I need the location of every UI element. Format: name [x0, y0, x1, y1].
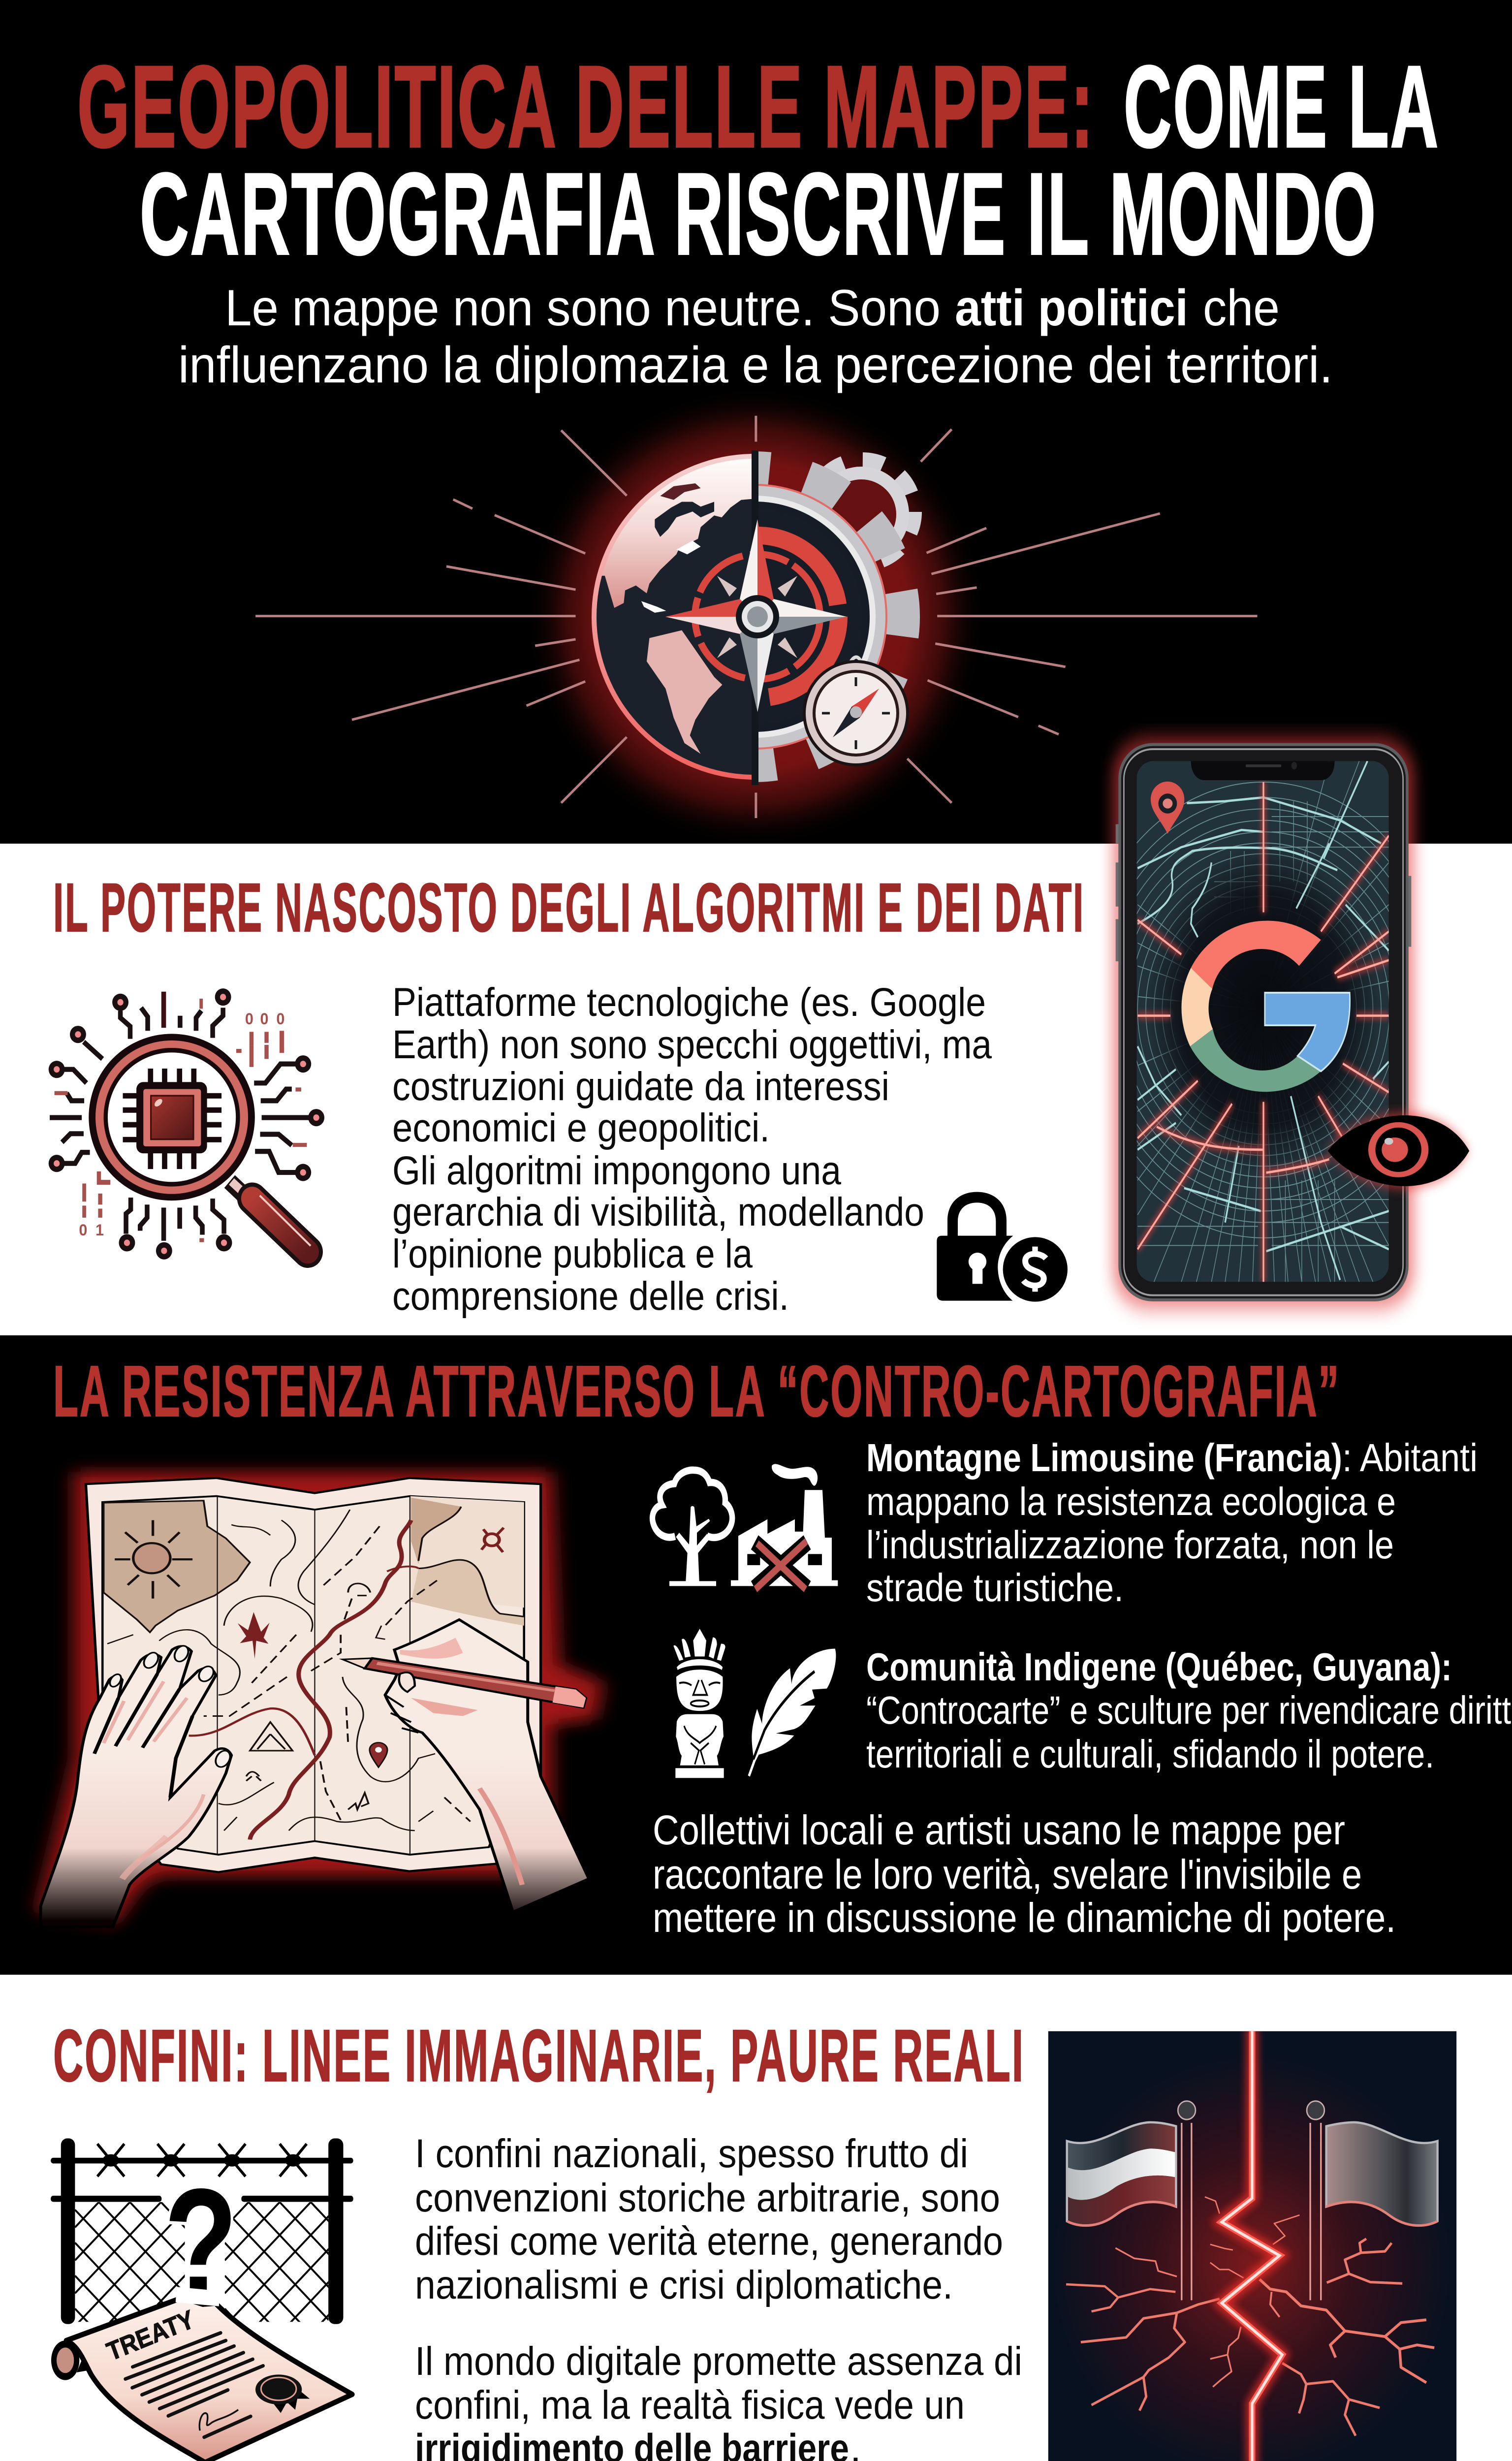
magnifier handle [230, 1181, 311, 1252]
text block: nazionalismi e crisi diplomatiche. [415, 2263, 953, 2307]
small compass [803, 657, 909, 766]
text block: Gli algoritmi impongono una [392, 1148, 841, 1193]
panel: hidden power of algorithms [0, 844, 1512, 1335]
magnifier lens [89, 1034, 255, 1200]
icon: globe, compass and gear with rays [255, 385, 1258, 848]
icon: eye [1328, 1112, 1469, 1189]
text: collectives paragraph: mettere in discussione le dinamiche di potere. [653, 1894, 1396, 1941]
text: collectives paragraph [653, 1807, 1396, 1941]
text: Montagne Limousine: l’industrializzazione forzata, non le [866, 1523, 1394, 1567]
binary digits [55, 999, 307, 1242]
globe [592, 454, 752, 780]
left hand [41, 1644, 233, 1927]
text block: comprensione delle crisi. [392, 1274, 789, 1319]
icon: barbed wire fence and treaty [51, 2138, 355, 2461]
text block: costruzioni guidate da interessi [392, 1064, 889, 1109]
fence [51, 2096, 353, 2440]
text: Montagne Limousine: mappano la resistenza ecologica e [866, 1480, 1396, 1523]
map glow [37, 1472, 604, 1924]
red cross [755, 1541, 807, 1589]
icon: padlock and dollar coin [937, 1192, 1068, 1302]
text: Montagne Limousine: : Abitanti [1342, 1436, 1478, 1480]
text block: difesi come verità eterne, generando [415, 2219, 1003, 2264]
panel: borders [0, 1975, 1512, 2461]
text block [392, 980, 992, 1319]
text block: Earth) non sono specchi oggettivi, ma [392, 1022, 992, 1067]
binary digits: 0 [260, 1010, 269, 1028]
text block: convenzioni storiche arbitrarie, sono [415, 2176, 1000, 2220]
folded paper [86, 1478, 541, 1872]
text: collectives paragraph: raccontare le loro verità, svelare l'invisibile e [653, 1851, 1362, 1897]
panel: header [77, 42, 1440, 833]
text block: confini, ma la realtà fisica vede un [415, 2383, 965, 2428]
subtitle: atti politici [955, 280, 1188, 337]
text block: I confini nazionali, spesso frutto di [415, 2131, 968, 2176]
red routes [189, 1520, 418, 1839]
tree [653, 1470, 732, 1586]
treaty document [51, 2287, 352, 2461]
text: collectives paragraph: Collettivi locali e artisti usano le mappe per [653, 1807, 1345, 1853]
binary digits: 0 [79, 1221, 87, 1239]
seal [255, 2374, 310, 2413]
illustration: smartphone map with Google G [1102, 724, 1473, 1322]
subtitle: influenzano la diplomazia e la percezione dei territori. [178, 337, 1333, 394]
chip [123, 1069, 221, 1169]
factory [731, 1464, 838, 1586]
statue [673, 1629, 725, 1778]
treaty label: TREATY [103, 2304, 198, 2366]
title [77, 42, 1440, 279]
circuit nodes [49, 988, 324, 1260]
text block [415, 2131, 1022, 2461]
phone screen map [1077, 761, 1449, 1282]
map symbols [115, 1520, 504, 1809]
small gear [812, 461, 913, 563]
icon: statue and feather [673, 1629, 836, 1778]
text: Comunità Indigene [866, 1645, 1512, 1776]
large gear [758, 451, 920, 782]
icon: magnifier over chip [49, 988, 324, 1260]
glowing border line [1222, 2028, 1282, 2461]
subtitle: Le mappe non sono neutre. Sono [225, 280, 941, 337]
phone glow [1113, 738, 1414, 1309]
text block: Il mondo digitale promette assenza di [415, 2339, 1022, 2384]
subtitle [178, 280, 1333, 394]
pencil [343, 1658, 586, 1707]
illustration: flags and cracked border [1048, 2028, 1456, 2461]
text block: gerarchia di visibilità, modellando [392, 1190, 924, 1234]
cracks [1066, 2197, 1434, 2436]
text: Montagne Limousine: strade turistiche. [866, 1566, 1124, 1609]
text block: economici e geopolitici. [392, 1105, 770, 1150]
barbs [97, 2144, 307, 2177]
binary digits: 1 [95, 1221, 104, 1239]
binary digits: 0 [276, 1010, 284, 1028]
question mark: ? [164, 2156, 238, 2331]
Google G logo [1181, 921, 1350, 1092]
icon: tree and crossed-out factory [653, 1464, 838, 1589]
fold lines and black contours [107, 1496, 471, 1855]
text: Montagne Limousine [866, 1436, 1478, 1609]
binary digits: 0 [245, 1010, 253, 1028]
panel: counter-cartography [25, 1351, 1512, 1941]
illustration: hands drawing a map [37, 1472, 604, 1927]
flags [1067, 2101, 1438, 2300]
map regions [104, 1498, 524, 1632]
phone body [1116, 743, 1411, 1301]
text block: Piattaforme tecnologiche (es. Google [392, 980, 986, 1025]
subtitle: che [1203, 280, 1280, 337]
compass rose [665, 519, 847, 712]
notch [1191, 761, 1335, 780]
text: Montagne Limousine: Montagne Limousine (Francia) [866, 1436, 1342, 1480]
circuit traces [50, 992, 309, 1241]
feather [747, 1648, 836, 1777]
icon: map pin [1151, 782, 1184, 834]
right hand [385, 1620, 589, 1912]
text block: l’opinione pubblica e la [392, 1231, 753, 1276]
